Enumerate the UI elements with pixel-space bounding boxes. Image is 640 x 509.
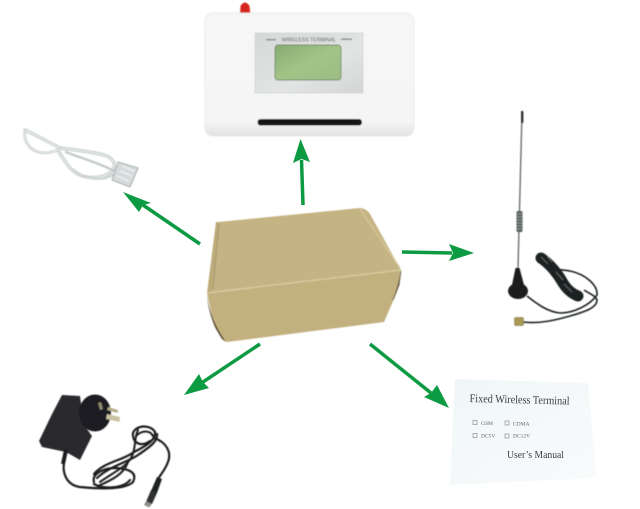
arrow: left to cable (123, 192, 200, 244)
plug base (79, 394, 111, 432)
whip (518, 112, 522, 268)
option DC12V (505, 434, 530, 440)
adapter body (39, 395, 92, 460)
box front (207, 270, 401, 342)
display panel (255, 33, 363, 93)
box top (212, 208, 401, 292)
option CDMA: CDMA (513, 422, 530, 428)
box side flap (207, 222, 219, 293)
arrow: down-left to adapter (184, 344, 260, 395)
option CDMA (505, 421, 530, 428)
arrow: down-right to manual (370, 344, 449, 408)
option DC5V (473, 434, 495, 440)
option DC12V: DC12V (513, 434, 530, 440)
LCD screen (275, 45, 341, 80)
power cord (64, 426, 169, 488)
telephone cable (25, 130, 138, 187)
arrow: right to antenna (402, 244, 474, 261)
coiled cable (523, 258, 597, 323)
option GSM: GSM (481, 421, 493, 427)
device body (205, 13, 414, 136)
arrow: up to terminal (293, 139, 310, 205)
connector (112, 162, 138, 187)
SMA connector (514, 318, 524, 326)
manual sheet (450, 379, 597, 485)
magnetic base (508, 283, 528, 299)
option GSM (473, 420, 493, 427)
wireless terminal device (205, 2, 414, 136)
power adapter (39, 394, 169, 508)
user's manual (450, 379, 597, 485)
DC barrel plug (151, 477, 162, 493)
plug pins (106, 414, 120, 422)
option DC5V: DC5V (481, 434, 495, 440)
manual title: Fixed Wireless Terminal (469, 392, 570, 408)
manual subtitle: User’s Manual (507, 449, 564, 461)
cardboard box (207, 208, 401, 342)
panel label: WIRELESS TERMINAL (282, 38, 336, 44)
icon: red antenna stub (240, 2, 250, 16)
slot (258, 119, 362, 126)
coil (516, 211, 522, 232)
antenna (508, 112, 597, 326)
